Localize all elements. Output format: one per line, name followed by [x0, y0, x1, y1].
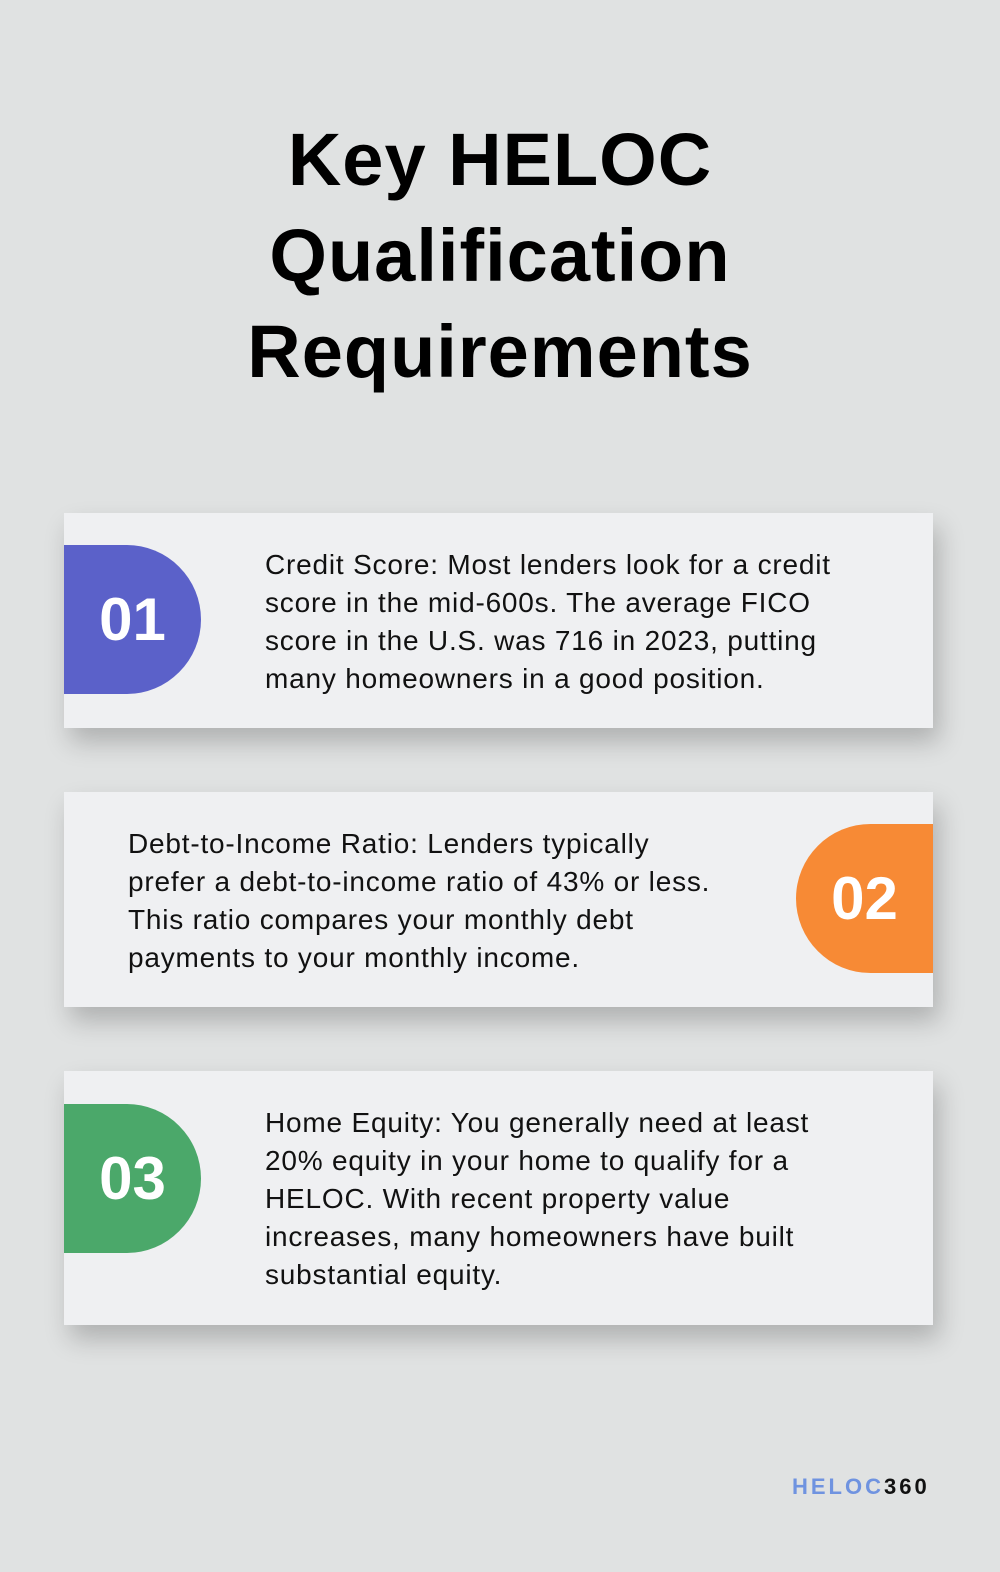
text: home equity: increases, many homeowners have built	[265, 1221, 794, 1252]
text: debt-to-income: Debt-to-Income Ratio: Lenders typically	[128, 828, 649, 859]
panel: home equity	[64, 1071, 933, 1325]
text: debt-to-income: payments to your monthly income.	[128, 942, 580, 973]
text: home equity	[265, 1107, 809, 1290]
badge 01: 01	[99, 586, 166, 653]
badge 01	[64, 545, 201, 694]
title: Requirements	[247, 310, 753, 393]
text: credit score	[265, 549, 831, 694]
text: credit score: many homeowners in a good position.	[265, 663, 765, 694]
text: home equity: Home Equity: You generally need at least	[265, 1107, 809, 1138]
text: debt-to-income: This ratio compares your monthly debt	[128, 904, 634, 935]
panel: debt-to-income	[64, 792, 933, 1007]
text: credit score: score in the U.S. was 716 in 2023, putting	[265, 625, 817, 656]
badge 02	[796, 824, 933, 973]
text: credit score: score in the mid-600s. The average FICO	[265, 587, 811, 618]
title: Qualification	[269, 214, 731, 297]
text: home equity: 20% equity in your home to qualify for a	[265, 1145, 789, 1176]
badge 02: 02	[831, 865, 898, 932]
text: debt-to-income	[128, 828, 710, 973]
logo: HELOC360	[792, 1474, 930, 1499]
title: Key HELOC	[288, 118, 712, 201]
text: home equity: substantial equity.	[265, 1259, 502, 1290]
text: debt-to-income: prefer a debt-to-income ratio of 43% or less.	[128, 866, 710, 897]
text: home equity: HELOC. With recent property value	[265, 1183, 730, 1214]
title	[247, 118, 753, 393]
panel: credit score	[64, 513, 933, 728]
badge 03	[64, 1104, 201, 1253]
text: credit score: Credit Score: Most lenders look for a credit	[265, 549, 831, 580]
badge 03: 03	[99, 1145, 166, 1212]
